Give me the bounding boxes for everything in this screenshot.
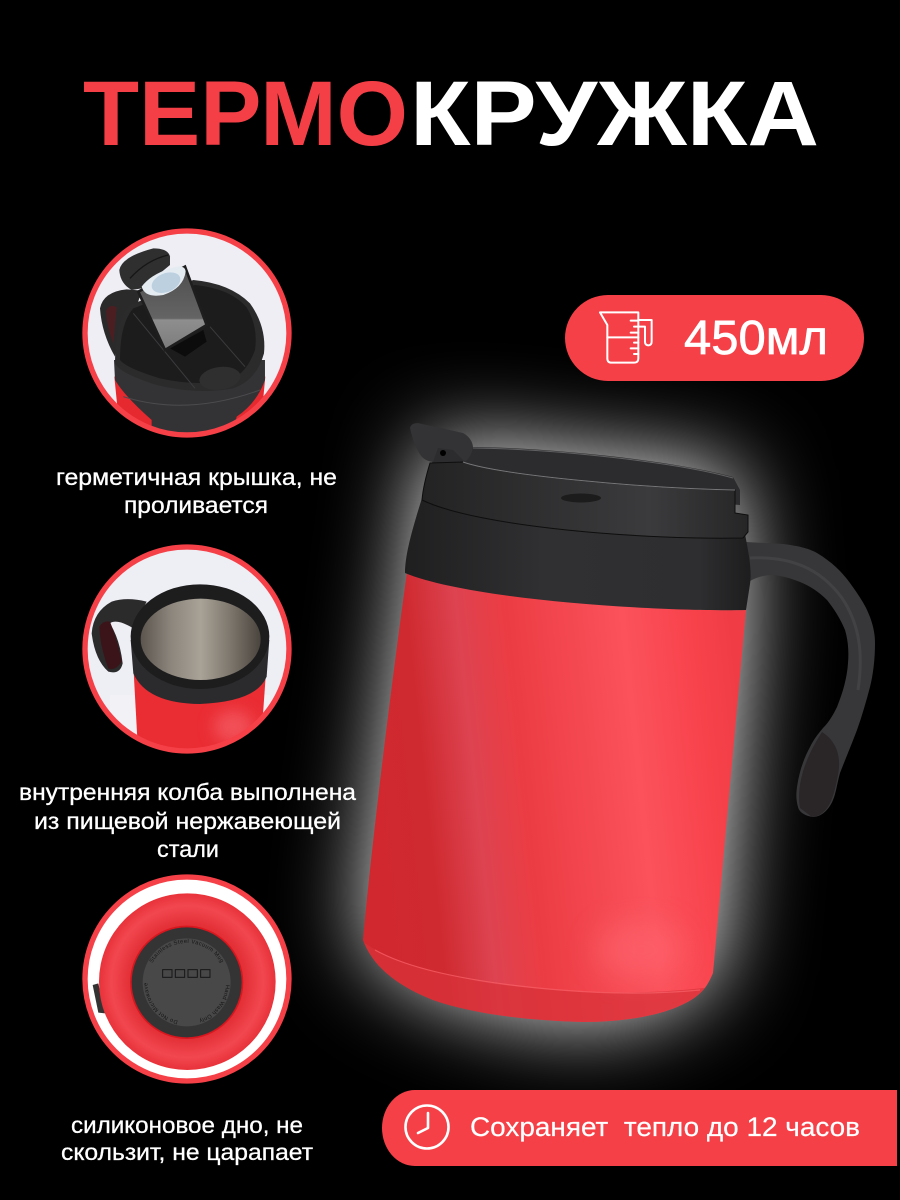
feature 2: flask photo: [85, 547, 289, 757]
feature 2 caption: стали: [157, 836, 219, 862]
icon: measuring jug: [600, 312, 652, 363]
feature 1 caption: проливается: [124, 492, 268, 518]
feature 2 caption: внутренняя колба выполнена: [19, 779, 357, 805]
capacity badge: [565, 295, 864, 381]
base engraving: Hand Wash Only: [200, 985, 230, 1022]
feature 3 caption: силиконовое дно, не: [71, 1112, 303, 1138]
feature 3: silicone base photo: [82, 874, 292, 1084]
icon: clock: [406, 1106, 448, 1148]
feature 3 caption: [61, 1112, 313, 1165]
base engraving: Do Not Microwave: [144, 983, 178, 1024]
banner text: Сохраняет тепло до 12 часов: [470, 1112, 860, 1142]
glow behind mug: [364, 440, 745, 1022]
title: [83, 63, 819, 165]
mug lid: [410, 423, 748, 538]
mug lid interior: [430, 440, 740, 505]
mug collar band: [405, 498, 751, 610]
mug body: [363, 574, 746, 1022]
base engraving: Stainless Steel Vacuum Mug: [150, 938, 224, 963]
feature 1 caption: [56, 464, 337, 518]
capacity value: 450мл: [684, 312, 828, 365]
title: ТЕРМО: [83, 63, 408, 165]
base engraving: [144, 938, 230, 1024]
feature 2 caption: [19, 779, 357, 862]
feature 1: lid photo: [85, 231, 289, 435]
feature 2 caption: из пищевой нержавеющей: [34, 808, 341, 834]
feature 1 caption: герметичная крышка, не: [56, 464, 337, 490]
mug handle: [746, 542, 875, 817]
feature 3 caption: скользит, не царапает: [61, 1139, 313, 1165]
title: КРУЖКА: [410, 63, 819, 165]
heat retention banner: [382, 1090, 897, 1166]
photo: thermo mug: [350, 423, 875, 1030]
